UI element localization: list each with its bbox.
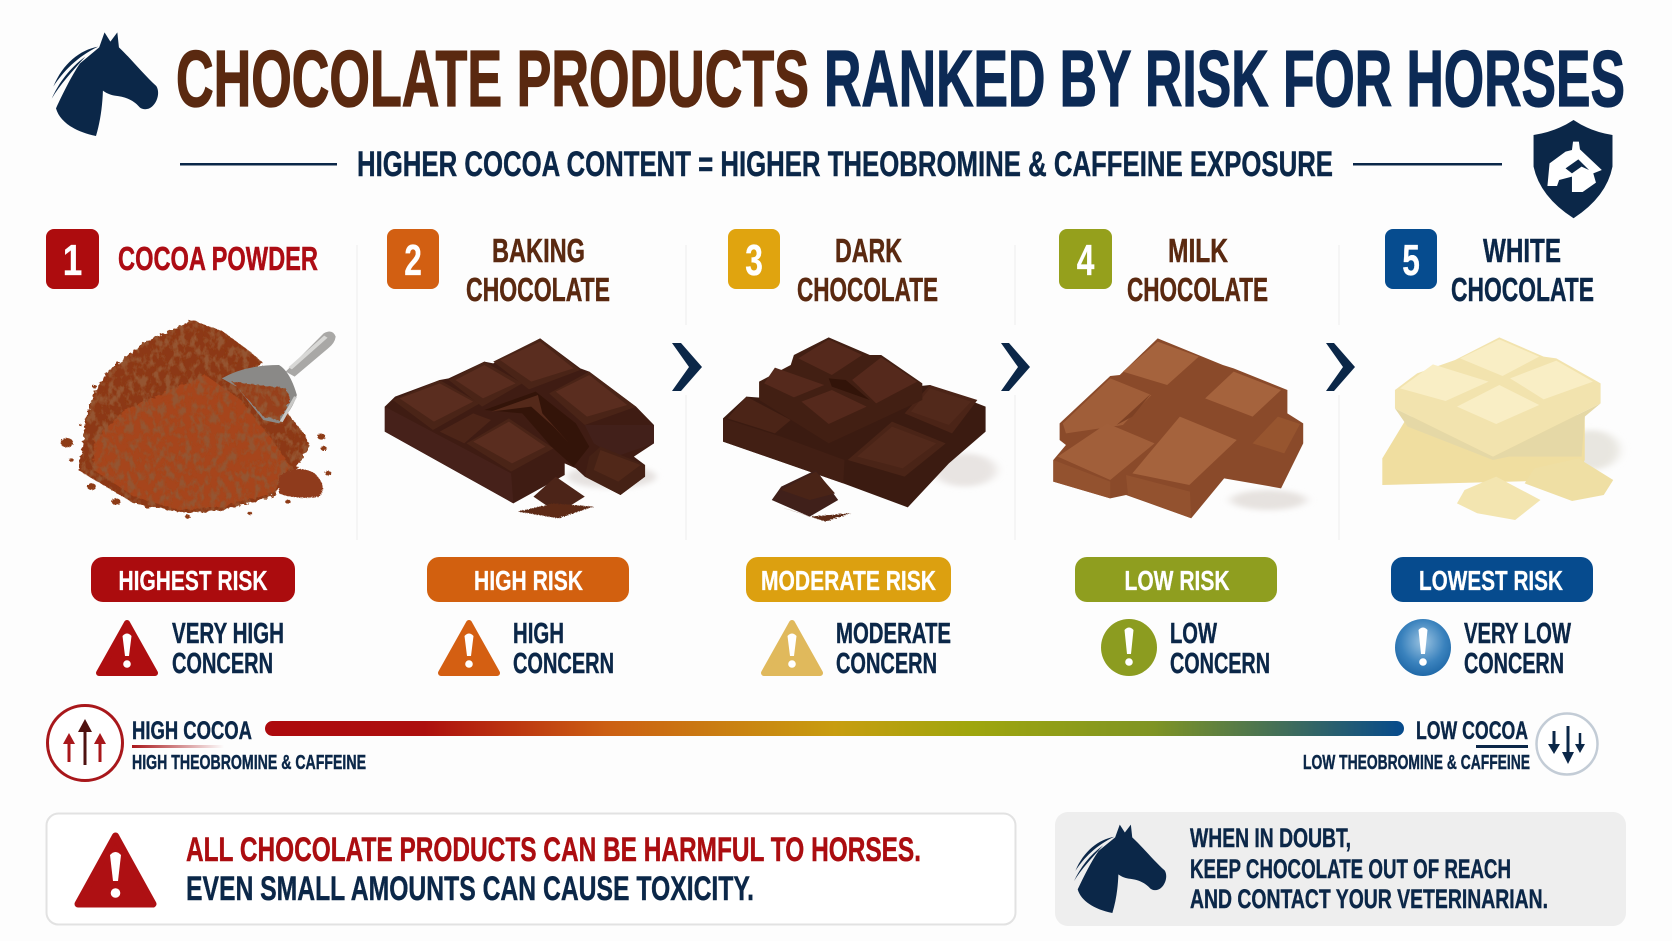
heading: white chocolate: WHITE: [1483, 232, 1561, 269]
heading: dark chocolate: DARK: [835, 232, 902, 269]
advice text: AND CONTACT YOUR VETERINARIAN.: [1190, 884, 1548, 914]
concern text: low concern: [1170, 618, 1270, 680]
heading: white chocolate: [1451, 232, 1594, 308]
advice text: WHEN IN DOUBT,: [1190, 823, 1351, 853]
concern text: very high concern: [172, 618, 284, 680]
arrow: chevron 2: [1001, 343, 1030, 391]
callout: toxicity warning: [46, 814, 1016, 924]
icon: blue alert circle: [1395, 619, 1451, 676]
concern text: very low concern: [1464, 618, 1571, 680]
risk pill: high risk: [427, 557, 629, 602]
concern text: very high concern: VERY HIGH: [172, 618, 284, 650]
image: milk chocolate bars: [1053, 338, 1306, 518]
concern text: very high concern: CONCERN: [172, 648, 273, 680]
panel: baking chocolate: [385, 229, 656, 680]
number badge 1: 1: [63, 236, 82, 285]
title: CHOCOLATE PRODUCTS: [176, 34, 809, 123]
gauge: cocoa level scale: [48, 706, 1598, 780]
label: low cocoa: [1303, 717, 1530, 774]
concern text: very low concern: VERY LOW: [1464, 618, 1571, 650]
title: [176, 34, 1625, 123]
image: cocoa powder pile with scoop: [61, 320, 336, 519]
advice text: [1190, 823, 1548, 914]
number badge 5: 5: [1402, 236, 1420, 285]
callout: veterinarian advice: [1055, 812, 1626, 926]
arrow: chevron 3: [1326, 343, 1355, 391]
number badge 5: [1385, 229, 1437, 289]
number badge 2: [387, 229, 439, 289]
image: baking chocolate bar: [385, 338, 656, 518]
heading: milk chocolate: [1127, 232, 1268, 308]
panel: cocoa powder: [46, 229, 336, 680]
number badge 1: [46, 229, 99, 289]
concern text: high concern: [513, 618, 614, 680]
warning text: [186, 831, 921, 908]
risk pill: highest risk: [91, 557, 295, 602]
label: high cocoa: [132, 717, 366, 774]
advice text: KEEP CHOCOLATE OUT OF REACH: [1190, 854, 1511, 884]
heading: baking chocolate: CHOCOLATE: [466, 271, 610, 308]
panel: milk chocolate: [1053, 229, 1306, 680]
concern text: moderate concern: MODERATE: [836, 618, 951, 650]
risk pill: high risk: HIGH RISK: [474, 565, 583, 596]
risk pill: low risk: LOW RISK: [1124, 565, 1230, 596]
concern text: low concern: CONCERN: [1170, 648, 1270, 680]
risk pill: highest risk: HIGHEST RISK: [118, 565, 268, 596]
concern text: moderate concern: [836, 618, 951, 680]
heading: white chocolate: CHOCOLATE: [1451, 271, 1594, 308]
icon: warning triangle red: [99, 623, 155, 673]
image: white chocolate stack: [1382, 337, 1620, 520]
label: high cocoa: HIGH THEOBROMINE & CAFFEINE: [132, 752, 366, 774]
concern text: high concern: CONCERN: [513, 648, 614, 680]
icon: high cocoa arrows up: [48, 706, 122, 780]
gradient bar: [265, 721, 1404, 736]
heading: dark chocolate: CHOCOLATE: [797, 271, 938, 308]
risk pill: lowest risk: LOWEST RISK: [1419, 565, 1563, 596]
icon: shield badge: [1534, 120, 1612, 218]
concern text: moderate concern: CONCERN: [836, 648, 937, 680]
number badge 3: 3: [745, 236, 763, 285]
subtitle: HIGHER COCOA CONTENT = HIGHER THEOBROMINE & CAFFEINE EXPOSURE: [357, 145, 1333, 184]
icon: large warning triangle: [78, 836, 153, 904]
label: low cocoa: LOW COCOA: [1416, 717, 1528, 745]
heading: milk chocolate: CHOCOLATE: [1127, 271, 1268, 308]
icon: green alert circle: [1101, 619, 1157, 676]
heading: baking chocolate: [466, 232, 610, 308]
concern text: high concern: HIGH: [513, 618, 564, 650]
risk pill: moderate risk: [746, 557, 951, 602]
concern text: very low concern: CONCERN: [1464, 648, 1564, 680]
label: low cocoa: LOW THEOBROMINE & CAFFEINE: [1303, 752, 1530, 774]
icon: warning triangle amber: [764, 623, 820, 673]
risk pill: lowest risk: [1391, 557, 1593, 602]
icon: low cocoa arrows down: [1536, 714, 1598, 774]
heading: dark chocolate: [797, 232, 938, 308]
icon: warning triangle orange: [441, 623, 497, 673]
number badge 3: [728, 229, 780, 289]
panel: white chocolate: [1382, 229, 1620, 680]
icon: horse head logo: [52, 32, 158, 136]
arrow: chevron 1: [672, 343, 702, 391]
number badge 4: [1059, 229, 1112, 289]
warning text: ALL CHOCOLATE PRODUCTS CAN BE HARMFUL TO HORSES.: [186, 831, 921, 869]
concern text: low concern: LOW: [1170, 618, 1217, 650]
heading: cocoa powder: COCOA POWDER: [118, 240, 318, 277]
heading: milk chocolate: MILK: [1168, 232, 1228, 269]
heading: baking chocolate: BAKING: [492, 232, 585, 269]
number badge 2: 2: [404, 236, 422, 285]
panel: dark chocolate: [723, 229, 996, 680]
warning text: EVEN SMALL AMOUNTS CAN CAUSE TOXICITY.: [186, 870, 754, 908]
number badge 4: 4: [1077, 236, 1095, 285]
risk pill: moderate risk: MODERATE RISK: [761, 565, 936, 596]
label: high cocoa: HIGH COCOA: [132, 717, 252, 745]
icon: horse head: [1074, 825, 1166, 913]
risk pill: low risk: [1075, 557, 1277, 602]
image: dark chocolate stack: [723, 337, 996, 522]
